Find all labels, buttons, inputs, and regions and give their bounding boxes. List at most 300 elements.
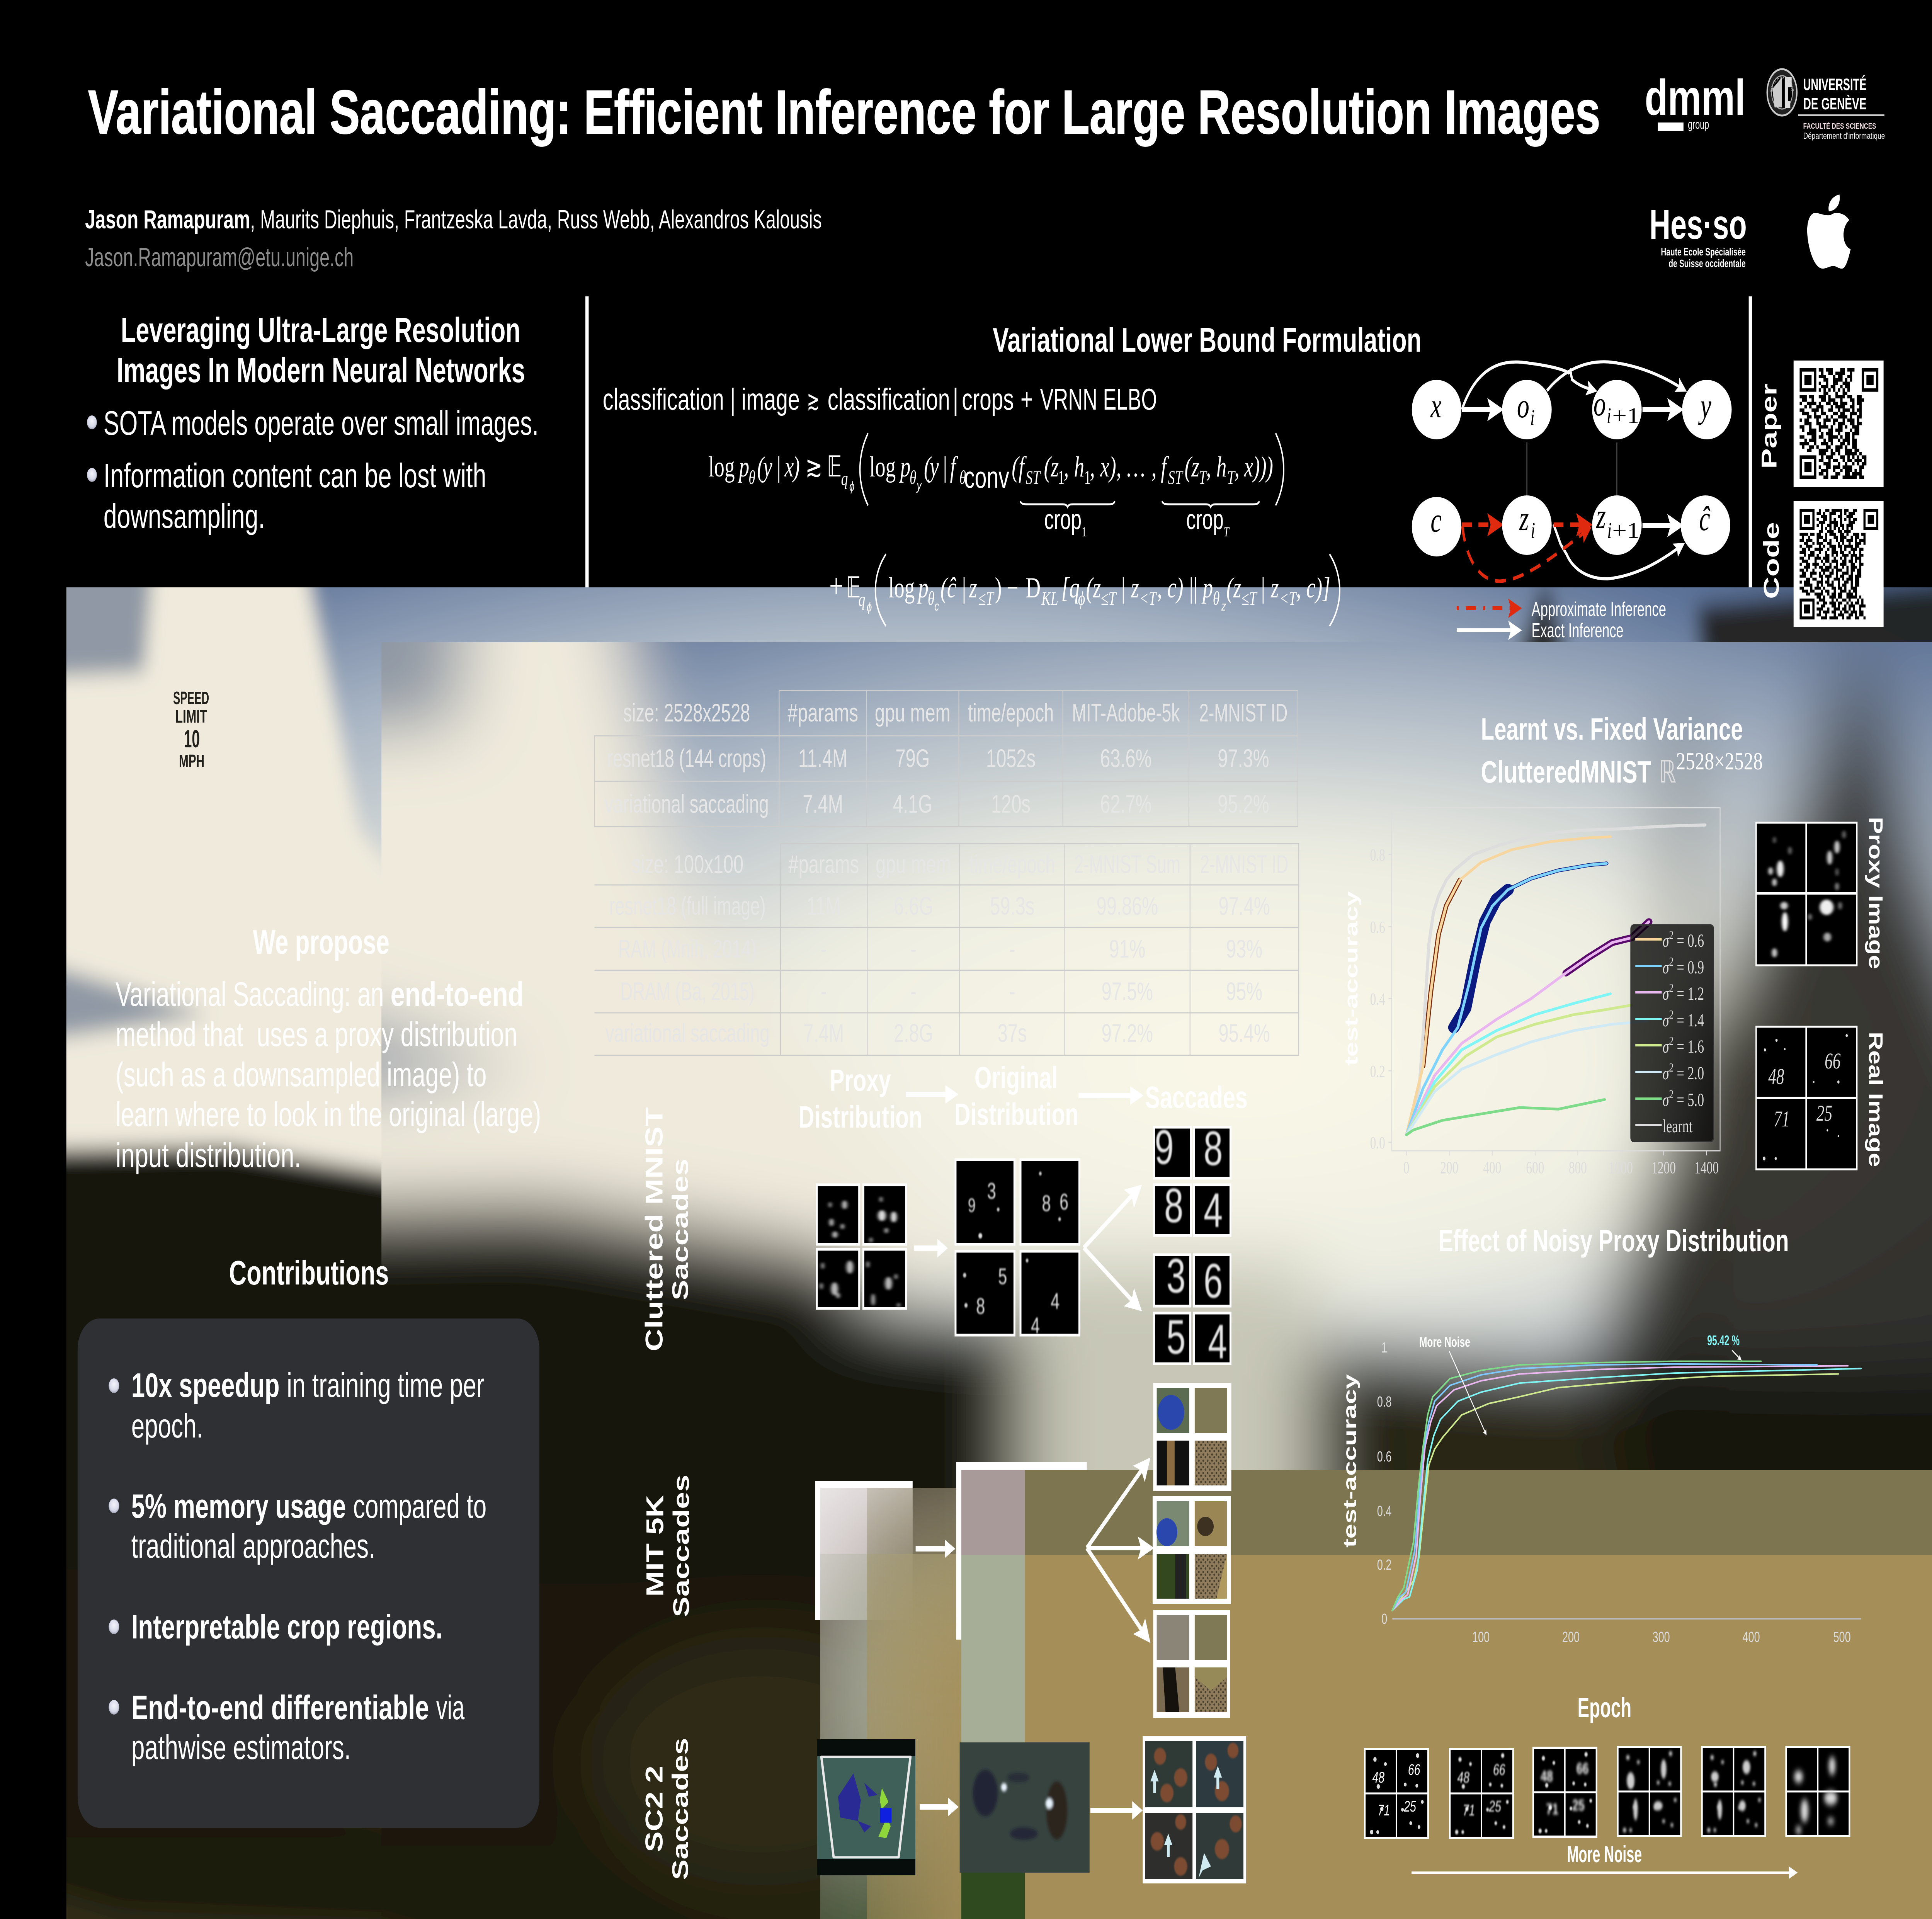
paragraph: Variational Saccading: an <box>116 976 384 1014</box>
equation line 1: q <box>841 468 848 490</box>
logo: Hes-so <box>1650 201 1747 270</box>
arrow <box>920 1798 959 1816</box>
noise level image strip: 66 <box>1577 1760 1588 1777</box>
table: 100x100 results: 93% <box>1226 935 1262 963</box>
node: x <box>1412 380 1461 439</box>
logo: Université de Genève: UNIVERSITÉ <box>1803 75 1866 94</box>
chart: noise curves: 0.6 <box>1377 1448 1391 1465</box>
chart legend: = 0.9 <box>1673 958 1704 978</box>
logo: Hes-so: Hes·so <box>1650 201 1747 248</box>
chart: test accuracy over epochs: 0.8 <box>1370 846 1385 864</box>
node: c <box>1412 497 1461 556</box>
photo: speed limit sign, full resolution: SPEED <box>173 689 209 708</box>
equation line 2: ≤T <box>1242 588 1258 609</box>
proxy image grid <box>1755 822 1857 966</box>
equation line 1: y <box>916 478 922 493</box>
logo: Université de Genève <box>0 0 1885 141</box>
chart legend: σ <box>1663 984 1670 1004</box>
equation line 2 <box>829 554 1340 626</box>
equation line 1: 1 <box>1058 467 1065 488</box>
table: 100x100 results: 37s <box>998 1019 1027 1048</box>
table: 100x100 results: - <box>1009 935 1015 963</box>
equation line 2: 𝔼 <box>846 571 861 604</box>
equation line 1: , x), <box>1090 451 1121 483</box>
equation line 1: ≳ <box>805 450 823 483</box>
chart legend: 2 <box>1669 1034 1673 1048</box>
table: 100x100 results: 59.3s <box>990 892 1034 920</box>
original grid: 8 <box>976 1293 985 1319</box>
chart: noise curves: 0.4 <box>1377 1502 1391 1519</box>
real image grid: 66 <box>1825 1048 1841 1073</box>
logo: Hes-so: de Suisse occidentale <box>1668 258 1746 270</box>
chart: noise curves: 300 <box>1653 1628 1670 1645</box>
real image grid: 25 <box>1816 1101 1832 1126</box>
bullet list <box>87 405 539 536</box>
chart legend <box>1631 925 1713 1142</box>
arrow <box>916 1540 955 1558</box>
table: 100x100 results: - <box>910 977 917 1006</box>
chart: test accuracy over epochs: 400 <box>1483 1159 1501 1177</box>
equation summary line: | <box>953 383 958 416</box>
chart legend: 2 <box>1669 981 1673 995</box>
node: o_i+1: +1 <box>1612 403 1640 428</box>
table: 2528x2528 results: variational saccading <box>604 790 769 818</box>
equation line 1: (y | <box>924 451 947 483</box>
node: z_i+1: z <box>1596 497 1606 536</box>
original grid: 9 <box>968 1195 976 1216</box>
contributions card: pathwise estimators. <box>131 1729 351 1767</box>
noise level image strip <box>1364 1746 1850 1839</box>
panel: learnt vs fixed variance <box>1341 711 1887 1177</box>
heading <box>1481 711 1763 790</box>
table: 100x100 results: 6.6G <box>894 892 933 920</box>
chart: test accuracy over epochs: 1400 <box>1694 1159 1719 1177</box>
table: 100x100 results: #params <box>788 850 859 879</box>
table: 2528x2528 results: 79G <box>895 744 930 773</box>
equation line 2: ≤T <box>1101 588 1117 609</box>
chart legend: = 2.0 <box>1673 1063 1704 1084</box>
contributions card: via <box>436 1689 465 1727</box>
equation line 2: − <box>1007 572 1019 604</box>
table: 100x100 results: 91% <box>1109 935 1145 963</box>
original game frame <box>960 1742 1090 1873</box>
chart legend: σ <box>1663 958 1670 978</box>
underbrace: crop 1 <box>1020 501 1115 539</box>
chart: noise curves: 500 <box>1833 1628 1851 1645</box>
underbrace: crop T: crop <box>1186 504 1224 535</box>
chart: test accuracy over epochs <box>1370 808 1720 1177</box>
table: 2528x2528 results: 120s <box>991 790 1031 818</box>
saccade grid 2 <box>1153 1496 1231 1604</box>
equation line 1 <box>708 433 1284 505</box>
equation line 2: (ĉ | <box>940 572 966 604</box>
chart: noise curves: 0 <box>1381 1610 1387 1627</box>
heading: ClutteredMNIST <box>1481 754 1651 789</box>
chart: noise curves: 100 <box>1472 1628 1490 1645</box>
underbrace: crop T: T <box>1224 524 1230 539</box>
panel: contributions <box>78 1254 539 1828</box>
panel: effect of noisy proxy distribution <box>1340 1223 1861 1879</box>
table: 100x100 results: 2.8G <box>894 1019 933 1048</box>
fork arrows <box>1084 1187 1139 1308</box>
chart: test accuracy over epochs: 600 <box>1526 1159 1544 1177</box>
row label: SC2 2 <box>641 1766 668 1852</box>
contributions card: 10x speedup <box>131 1367 280 1405</box>
equation line 2: z <box>969 572 977 604</box>
equation line 2: (z <box>1226 572 1241 604</box>
authors: , Maurits Diephuis, Frantzeska Lavda, Russ Webb, Alexandros Kalousis <box>250 205 822 234</box>
node: o_i: o <box>1517 386 1529 425</box>
arrow <box>914 1239 948 1257</box>
annotation: best accuracy <box>1707 1333 1741 1360</box>
row: MIT 5K saccades <box>642 1383 1932 1919</box>
chart: noise curves: 0.8 <box>1377 1393 1391 1410</box>
underbrace: crop 1: crop <box>1044 504 1082 535</box>
bullet list: Information content can be lost with <box>104 457 486 495</box>
panel: we propose <box>116 924 541 1175</box>
column headers: proxy, original, saccades <box>798 1060 1248 1134</box>
table: 100x100 results: DRAM (Ba, 2015) <box>620 977 755 1006</box>
table: 100x100 results: RAM (Mnih, 2014) <box>618 935 757 963</box>
chart legend: learnt <box>1663 1116 1693 1137</box>
chart: noise curves <box>1377 1339 1861 1645</box>
table: 2528x2528 results: 7.4M <box>803 790 843 818</box>
equation line 2: || <box>1189 572 1197 604</box>
equation line 1: 1 <box>1084 467 1091 488</box>
node: c hat: ĉ <box>1699 499 1711 538</box>
table: 2528x2528 results: 97.3% <box>1218 744 1269 773</box>
row label <box>642 1475 694 1617</box>
equation line 1: θ <box>959 467 966 488</box>
photo: speed limit sign, full resolution: LIMIT <box>175 707 207 726</box>
equation line 1: log <box>869 451 896 483</box>
table: 2528x2528 results: 11.4M <box>798 744 847 773</box>
column headers: proxy, original, saccades: Distribution <box>954 1097 1078 1131</box>
photo: downsampled blurred version <box>179 463 1932 1919</box>
y axis label: test-accuracy <box>1340 1374 1360 1548</box>
paragraph: (such as a downsampled image) to <box>116 1056 486 1094</box>
node: o_i: i <box>1530 405 1535 430</box>
legend: Approximate Inference <box>1532 598 1666 621</box>
table: 2528x2528 results: size: 2528x2528 <box>623 699 750 727</box>
equation line 2: | z <box>1120 572 1139 604</box>
qr code: code <box>1794 501 1884 627</box>
equation line 1: (y | x) <box>757 451 800 483</box>
column headers: proxy, original, saccades: Proxy <box>830 1063 891 1097</box>
row label <box>641 1738 693 1880</box>
equation line 1: p <box>738 451 749 483</box>
saccade grid 3 <box>1153 1610 1230 1718</box>
chart legend: σ <box>1663 1063 1670 1084</box>
node: y: y <box>1698 386 1711 425</box>
equation line 1: p <box>899 451 910 483</box>
equation line 2: ϕ <box>867 600 872 614</box>
chart legend: σ <box>1663 1011 1670 1031</box>
chart legend: 2 <box>1669 955 1673 969</box>
equation line 2: (z <box>1086 572 1101 604</box>
original grid: 6 <box>1060 1189 1068 1215</box>
equation line 2: c <box>934 599 939 614</box>
chart: test accuracy over epochs: 0.4 <box>1370 990 1385 1009</box>
equation line 1: ϕ <box>849 479 854 494</box>
column headers: proxy, original, saccades: Saccades <box>1145 1080 1248 1114</box>
chart: noise curves: 0.2 <box>1377 1556 1391 1573</box>
equation line 1: f <box>950 451 958 483</box>
node: o_i+1: o <box>1594 384 1606 423</box>
equation summary line: classification <box>828 383 950 416</box>
label: real image: Real Image <box>1864 1032 1887 1167</box>
chart legend: 2 <box>1669 928 1673 942</box>
original grid: 5 <box>998 1264 1007 1289</box>
logo: Université de Genève: FACULTÉ DES SCIENCES <box>1803 122 1876 131</box>
contributions card: epoch. <box>131 1407 203 1445</box>
equation line 1: log <box>708 451 735 483</box>
authors: Jason Ramapuram <box>85 205 250 234</box>
row label: Saccades <box>669 1475 694 1617</box>
equation line 2: log <box>888 572 915 604</box>
chart: test accuracy over epochs: 800 <box>1569 1159 1587 1177</box>
table: 2528x2528 results <box>594 691 1298 827</box>
equation line 2: θ <box>928 588 934 609</box>
chart legend: σ <box>1663 931 1670 951</box>
logo: Hes-so: Haute Ecole Spécialisée <box>1661 246 1746 258</box>
chart legend: 2 <box>1669 1008 1673 1022</box>
table: 100x100 results: 7.4M <box>804 1019 844 1048</box>
equation line 1: , h <box>1064 451 1084 483</box>
noise level image strip: 66 <box>1493 1761 1505 1778</box>
bullet list: SOTA models operate over small images. <box>104 405 539 442</box>
table: 2528x2528 results: #params <box>787 699 858 727</box>
saccade grid 2 <box>1154 1249 1230 1368</box>
table: 2528x2528 results: MIT-Adobe-5k <box>1072 699 1180 727</box>
table: 2528x2528 results: resnet18 (144 crops) <box>607 744 766 773</box>
equation line 1: , <box>1151 451 1156 483</box>
contributions card <box>78 1318 539 1828</box>
equation line 1: θ <box>748 467 755 488</box>
chart: test accuracy over epochs: 0.2 <box>1370 1062 1385 1081</box>
photo: speed limit sign, full resolution <box>0 408 1932 1919</box>
chart legend: = 1.2 <box>1673 984 1704 1004</box>
proxy grid <box>815 1481 1932 1919</box>
heading: Effect of Noisy Proxy Distribution <box>1439 1223 1789 1258</box>
table: 100x100 results: - <box>910 935 917 963</box>
contributions card: End-to-end differentiable <box>131 1689 429 1727</box>
original grid: 3 <box>987 1178 996 1204</box>
equation line 1: , x))) <box>1234 451 1273 483</box>
table: 100x100 results: gpu mem <box>876 850 951 879</box>
chart: noise curves: 1 <box>1381 1339 1387 1356</box>
node: c: c <box>1430 500 1442 539</box>
node: y <box>1682 380 1731 439</box>
real image grid <box>1755 1026 1857 1170</box>
panel: variational lower bound <box>603 322 1422 626</box>
row label: Saccades <box>668 1738 693 1880</box>
underbrace: crop 1: 1 <box>1082 524 1087 539</box>
proxy minimap <box>817 1739 915 1875</box>
label: code: Code <box>1760 522 1784 599</box>
chart legend: σ <box>1663 1037 1670 1057</box>
x axis label: Epoch <box>1578 1692 1631 1723</box>
equation line 2: ϕ <box>1078 588 1085 609</box>
equation summary line: VRNN ELBO <box>1040 383 1157 416</box>
heading: leveraging ultra-large resolution: Leveraging Ultra-Large Resolution <box>121 310 520 350</box>
heading: leveraging ultra-large resolution <box>117 310 525 390</box>
approximate inference arrows <box>1462 525 1589 581</box>
column headers: proxy, original, saccades: Original <box>975 1060 1058 1095</box>
row label: Cluttered MNIST <box>641 1107 668 1351</box>
equation line 1: f <box>1161 451 1169 483</box>
chart legend: = 1.6 <box>1673 1037 1704 1057</box>
table: 2528x2528 results: 62.7% <box>1100 790 1151 818</box>
row label <box>641 1107 693 1351</box>
table: 2528x2528 results: gpu mem <box>875 699 951 727</box>
label: proxy image: Proxy Image <box>1864 817 1887 969</box>
chart: test accuracy over epochs: 0.0 <box>1370 1134 1385 1152</box>
node: o_i+1: i <box>1607 403 1611 428</box>
contributions card: compared to <box>353 1488 486 1526</box>
table: 100x100 results: resnet18 (full image) <box>609 892 765 920</box>
saccade grid 1: 4 <box>1204 1183 1223 1237</box>
noise level image strip: 71 <box>1378 1802 1390 1819</box>
equation line 1: (z <box>1185 451 1199 483</box>
table: 100x100 results: 2-MNIST Sum <box>1074 850 1180 879</box>
panel dividers <box>587 296 1932 1919</box>
node: z_i: i <box>1531 518 1535 543</box>
logo: dmml group: dmml <box>1645 70 1745 126</box>
noise level image strip: 48 <box>1541 1768 1553 1785</box>
paragraph: end-to-end <box>391 976 524 1014</box>
exact inference arrows <box>1462 362 1685 579</box>
chart: test accuracy over epochs: 200 <box>1440 1159 1458 1177</box>
heading: Learnt vs. Fixed Variance <box>1481 711 1743 746</box>
chart legend: = 0.6 <box>1673 931 1704 951</box>
saccade grid 1: 8 <box>1204 1121 1223 1175</box>
logo: Université de Genève: Département d'informatique <box>1803 132 1885 141</box>
equation line 2: | z <box>1260 572 1279 604</box>
equation line 2: KL <box>1041 588 1058 609</box>
saccade grid 1: 8 <box>1164 1179 1184 1232</box>
chart: noise curves: 200 <box>1562 1628 1580 1645</box>
photo: speed limit sign, full resolution: 10 <box>184 725 200 753</box>
noise level image strip: 48 <box>1372 1769 1385 1786</box>
noise level image strip: 66 <box>1408 1761 1420 1778</box>
annotation: more noise <box>1419 1334 1486 1434</box>
heading: 2528×2528 <box>1676 748 1763 775</box>
real image grid: 71 <box>1774 1106 1790 1131</box>
original grid <box>956 1462 1932 1919</box>
node: c hat <box>1681 495 1730 555</box>
equation line 2: + <box>829 566 843 605</box>
node: z_i+1: +1 <box>1612 518 1640 543</box>
equation line 2: p <box>1201 572 1213 604</box>
paragraph: learn where to look in the original (large) <box>116 1096 541 1134</box>
equation line 2: z <box>1221 599 1226 614</box>
chart: test accuracy over epochs: 1000 <box>1609 1159 1633 1177</box>
contributions card: Interpretable crop regions. <box>131 1608 442 1646</box>
node: z_i <box>1502 495 1552 555</box>
equation line 2: [q <box>1061 572 1080 604</box>
original grid <box>956 1160 1079 1338</box>
chart: test accuracy over epochs: 1200 <box>1651 1159 1676 1177</box>
graphical model diagram <box>1412 362 1731 642</box>
heading: leveraging ultra-large resolution: Images In Modern Neural Networks <box>117 350 525 390</box>
equation line 1: T <box>1199 467 1208 488</box>
equation line 2: , c) <box>1157 572 1184 604</box>
table: 100x100 results: variational saccading <box>605 1019 770 1048</box>
logo: Université de Genève: DE GENÈVE <box>1803 94 1866 113</box>
chart: test accuracy over epochs: 0 <box>1403 1159 1409 1177</box>
table: 100x100 results: 2-MNIST ID <box>1200 850 1288 879</box>
table: 100x100 results: 11M <box>807 892 841 920</box>
bullet list: downsampling. <box>104 498 265 536</box>
row: cluttered MNIST saccades <box>641 1107 1230 1368</box>
underbrace: crop T <box>1162 501 1259 539</box>
contributions card: in training time per <box>287 1367 485 1405</box>
proxy grid <box>817 1185 906 1308</box>
node: z_i: z <box>1519 499 1529 538</box>
table: 100x100 results: 99.86% <box>1097 892 1158 920</box>
table: 100x100 results: time/epoch <box>969 850 1055 879</box>
saccade grid 2: 4 <box>1208 1315 1227 1368</box>
fork arrows <box>1087 1461 1151 1640</box>
chart legend: = 1.4 <box>1673 1011 1704 1031</box>
email: Jason.Ramapuram@etu.unige.ch <box>85 243 354 272</box>
chart legend: 2 <box>1669 1061 1673 1075</box>
table: 2528x2528 results: 2-MNIST ID <box>1199 699 1287 727</box>
original grid: 8 <box>1042 1191 1051 1216</box>
table: 100x100 results: 95% <box>1226 977 1262 1006</box>
node: o_i+1 <box>1592 380 1642 439</box>
equation line 1: ST <box>1168 467 1184 488</box>
more noise arrow <box>1412 1842 1798 1879</box>
paragraph <box>116 976 541 1175</box>
heading: ℝ <box>1659 754 1676 790</box>
noise level image strip: 71 <box>1463 1802 1475 1819</box>
equation line 1: conv <box>964 461 1009 494</box>
noise level image strip: 25 <box>1403 1798 1416 1815</box>
saccade grid 1: 9 <box>1155 1120 1174 1174</box>
node: o_i <box>1502 380 1552 439</box>
table: 100x100 results: 97.4% <box>1218 892 1270 920</box>
equation line 2: ) <box>995 572 1002 604</box>
saccade grid 2: 3 <box>1167 1249 1185 1303</box>
equation line 2: ≤T <box>978 588 995 609</box>
more noise arrow: More Noise <box>1567 1842 1642 1868</box>
table: 2528x2528 results: 63.6% <box>1100 744 1151 773</box>
saccade grid 2: 6 <box>1204 1254 1223 1308</box>
contributions card: 5% memory usage <box>131 1488 346 1526</box>
equation line 2: <T <box>1279 588 1297 609</box>
chart: test accuracy over epochs: 0.6 <box>1370 918 1385 937</box>
noise level image strip: 25 <box>1488 1798 1502 1815</box>
node: x: x <box>1430 386 1442 425</box>
row label: Saccades <box>668 1159 693 1300</box>
equation line 1: (f <box>1012 451 1027 483</box>
row: SC2 saccades <box>641 1736 1246 1883</box>
equation line 2: <T <box>1139 588 1157 609</box>
chart legend: 2 <box>1669 1087 1673 1101</box>
paragraph: method that uses a proxy distribution <box>116 1016 517 1054</box>
saccade grid 2: 5 <box>1167 1310 1185 1364</box>
table: 2528x2528 results: 4.1G <box>893 790 932 818</box>
chart: noise curves: 400 <box>1742 1628 1760 1645</box>
equation line 1: θ <box>910 467 916 488</box>
logo: Apple <box>1807 194 1850 269</box>
label: paper: Paper <box>1757 384 1781 469</box>
arrow <box>1090 1801 1143 1820</box>
paragraph: input distribution. <box>116 1137 301 1175</box>
photo: speed limit sign, full resolution: MPH <box>179 752 204 771</box>
